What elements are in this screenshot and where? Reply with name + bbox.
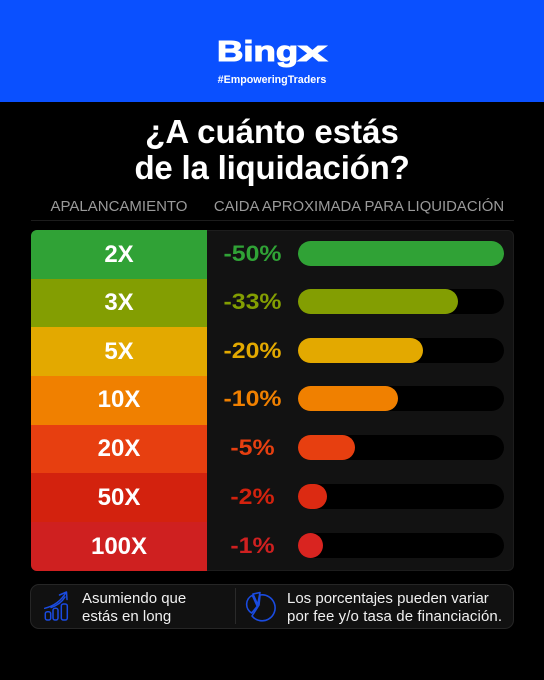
row 10X — [98, 386, 504, 413]
row 5X: -20% — [223, 338, 282, 363]
note: assumption: Asumiendo que — [82, 590, 186, 607]
logo: x — [298, 36, 327, 68]
row 3X — [104, 289, 504, 316]
note: assumption: estás en long — [82, 608, 171, 625]
row 20X: 20X — [98, 435, 140, 462]
row 50X: -2% — [230, 484, 275, 509]
row 50X: 50X — [98, 484, 140, 511]
row 20X — [98, 435, 504, 462]
title: ¿A cuánto estás — [145, 113, 399, 150]
note: variation: por fee y/o tasa de financiación. — [287, 608, 502, 625]
logo: Bing — [217, 36, 298, 68]
row 2X — [104, 241, 504, 268]
row 5X — [104, 338, 504, 365]
row 3X: -33% — [223, 289, 282, 314]
row 100X — [91, 533, 504, 560]
row 100X: -1% — [230, 533, 275, 558]
row 10X: 10X — [98, 386, 140, 413]
row 100X: 100X — [91, 533, 147, 560]
row 20X: -5% — [230, 435, 275, 460]
note: variation: Los porcentajes pueden variar — [287, 590, 489, 607]
row 2X: 2X — [104, 241, 134, 268]
row 3X: 3X — [104, 289, 134, 316]
icon: growth chart — [44, 591, 68, 621]
title: de la liquidación? — [134, 149, 410, 186]
row 2X: -50% — [223, 241, 282, 266]
panel: footer notes — [30, 584, 514, 629]
column heading: leverage: APALANCAMIENTO — [50, 198, 187, 215]
row 5X: 5X — [104, 338, 134, 365]
note: assumption — [82, 590, 186, 625]
hashtag: #EmpoweringTraders — [218, 74, 326, 86]
title — [134, 113, 410, 186]
note: variation — [287, 590, 502, 625]
icon: pie chart — [246, 592, 276, 622]
row 50X — [98, 484, 504, 511]
column heading: drop: CAIDA APROXIMADA PARA LIQUIDACIÓN — [214, 199, 504, 215]
row 10X: -10% — [223, 386, 282, 411]
header band — [0, 0, 544, 102]
